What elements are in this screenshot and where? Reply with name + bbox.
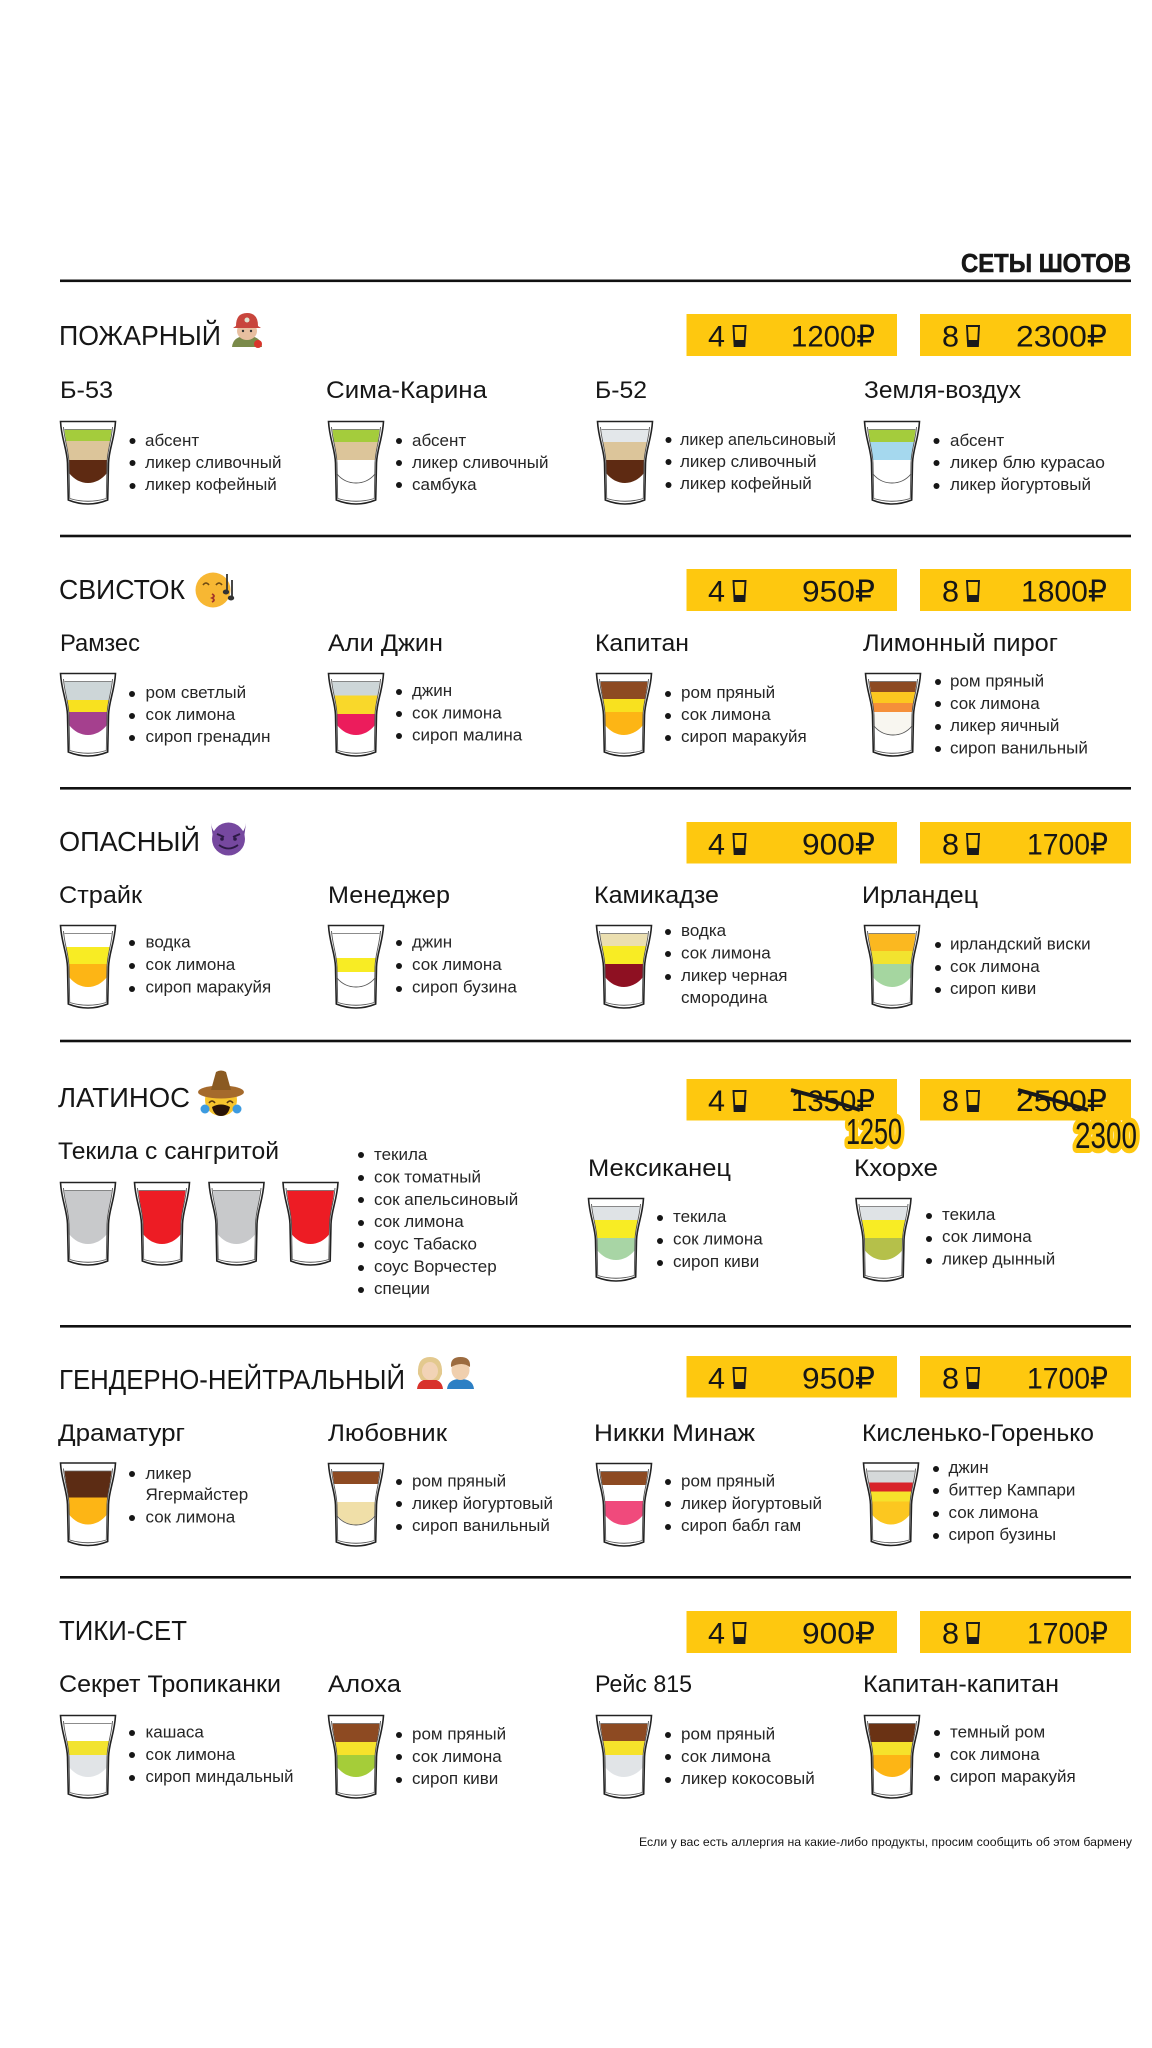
glass: [588, 1198, 644, 1281]
ingredients: сок лимона: [412, 1747, 502, 1766]
shot: Секрет Тропиканки: [59, 1671, 294, 1798]
section: ОПАСНЫЙ: [59, 822, 1131, 1008]
icon: whistling face emoji: [196, 572, 234, 608]
shot: Рейс 815: [595, 1671, 815, 1798]
ingredients: [129, 932, 271, 996]
ingredients: ром пряный: [412, 1472, 506, 1490]
glass: [328, 674, 384, 756]
ingredients: сироп маракуйя: [950, 1767, 1076, 1786]
ingredients: [358, 1145, 518, 1298]
glass: [596, 926, 652, 1008]
glass: [865, 674, 921, 756]
ingredients: водка: [146, 932, 191, 952]
ingredients: сок лимона: [146, 1508, 236, 1526]
ingredients: ликер сливочный: [680, 452, 816, 471]
price: 4 shots: 900₽: [802, 1618, 875, 1650]
section: ЛАТИНОС: [58, 1070, 1137, 1298]
ingredients: [396, 431, 548, 494]
price: 4 shots: [686, 569, 897, 611]
glass: [60, 926, 116, 1008]
price: 8 shots discounted: 2500₽: [1016, 1085, 1107, 1118]
ingredients: сироп бабл гам: [681, 1516, 801, 1535]
shot: Рейс 815: Рейс 815: [595, 1671, 692, 1698]
ingredients: сок лимона: [950, 694, 1040, 713]
shot: Любовник: Любовник: [328, 1420, 448, 1447]
ingredients: сок томатный: [374, 1168, 481, 1186]
ingredients: текила: [942, 1205, 996, 1224]
ingredients: кашаса: [146, 1722, 204, 1742]
price: 8 shots discounted: 8: [942, 1085, 959, 1118]
price: 8 shots: [920, 1611, 1131, 1653]
ingredients: ликер йогуртовый: [950, 475, 1091, 494]
ingredients: водка: [681, 921, 727, 940]
ingredients: сок лимона: [374, 1212, 464, 1231]
ingredients: ром пряный: [681, 1724, 775, 1744]
section: ПОЖАРНЫЙ: [59, 313, 1131, 504]
shot: Кхорхе: [854, 1155, 1055, 1281]
glass: [328, 1716, 384, 1798]
shot: Капитан-капитан: [863, 1671, 1076, 1798]
shot: Капитан-капитан: Капитан-капитан: [863, 1671, 1059, 1698]
heading: ГЕНДЕРНО-НЕЙТРАЛЬНЫЙ: [59, 1364, 405, 1395]
ingredients: [657, 1207, 763, 1271]
ingredients: ром пряный: [950, 672, 1044, 690]
ingredients: ликер йогуртовый: [412, 1494, 553, 1513]
shot: Б-52: Б-52: [595, 377, 647, 404]
ingredients: сок лимона: [681, 1747, 771, 1766]
icon: woman and man emoji: [417, 1357, 474, 1389]
ingredients: [396, 681, 523, 744]
ingredients: [396, 932, 517, 996]
shot: Али Джин: [328, 630, 523, 756]
glass: [596, 1716, 652, 1798]
ingredients: биттер Кампари: [948, 1480, 1075, 1500]
shot: Секрет Тропиканки: Секрет Тропиканки: [59, 1671, 281, 1698]
price: 4 shots discounted: [686, 1079, 902, 1152]
ingredients: ликер: [146, 1464, 191, 1483]
price: 4 shots discounted: 1250: [846, 1111, 902, 1152]
ingredients: [665, 1724, 815, 1788]
shot: Текила с сангритой: [58, 1138, 518, 1298]
heading: СВИСТОК: [59, 574, 186, 605]
ingredients: сок лимона: [948, 1503, 1039, 1522]
heading: ОПАСНЫЙ: [59, 826, 200, 857]
shot: Алоха: [328, 1671, 506, 1798]
price: 8 shots: 1700₽: [1027, 828, 1108, 862]
ingredients: сироп киви: [950, 979, 1036, 998]
ingredients: ликер кофейный: [680, 474, 812, 493]
ingredients: сок апельсиновый: [374, 1190, 518, 1209]
ingredients: ром пряный: [681, 683, 775, 702]
ingredients: смородина: [681, 988, 768, 1007]
shot: Б-53: [60, 377, 281, 504]
icon: sombrero laughing emoji: [198, 1070, 244, 1116]
ingredients: сироп бузина: [412, 978, 517, 996]
glass: [60, 1463, 116, 1546]
ingredients: сироп ванильный: [950, 738, 1088, 758]
ingredients: ликер яичный: [950, 716, 1059, 735]
ingredients: сок лимона: [942, 1227, 1032, 1246]
heading: ПОЖАРНЫЙ: [59, 320, 221, 351]
ingredients: ром пряный: [681, 1472, 775, 1490]
shot: Кисленько-Горенько: Кисленько-Горенько: [862, 1420, 1094, 1447]
shot: Сима-Карина: [326, 377, 548, 504]
shot: Капитан: [595, 630, 807, 756]
shot: Б-53: Б-53: [60, 377, 113, 404]
shot: Драматург: [58, 1420, 248, 1546]
shot: Никки Минаж: [594, 1420, 822, 1546]
shot: Б-52: [595, 377, 836, 504]
glass: [597, 422, 653, 504]
shot: Земля-воздух: [864, 377, 1105, 504]
section: СВИСТОК: [59, 569, 1131, 758]
ingredients: сироп бузины: [948, 1525, 1056, 1544]
price: 4 shots: 4: [708, 1618, 725, 1650]
ingredients: сироп киви: [412, 1769, 498, 1788]
glass: [328, 926, 384, 1008]
ingredients: текила: [374, 1145, 428, 1164]
ingredients: [933, 1458, 1075, 1544]
shot: Менеджер: [328, 882, 517, 1008]
ingredients: сок лимона: [412, 955, 502, 974]
price: 8 shots: 1800₽: [1021, 576, 1107, 608]
ingredients: [935, 672, 1088, 758]
icon: devil emoji: [211, 822, 246, 856]
shot: Менеджер: Менеджер: [328, 882, 450, 909]
ingredients: джин: [412, 681, 452, 700]
ingredients: сок лимона: [950, 957, 1040, 976]
ingredients: [396, 1472, 553, 1535]
shot: Али Джин: Али Джин: [328, 630, 443, 657]
glass: [596, 674, 652, 756]
price: 4 shots: [686, 1611, 897, 1653]
glass: sangrita: [134, 1182, 190, 1265]
price: 8 shots: 8: [942, 1362, 959, 1396]
ingredients: джин: [948, 1458, 989, 1477]
price: 4 shots: [686, 822, 897, 864]
shot: Камикадзе: Камикадзе: [594, 882, 719, 909]
glass: [328, 422, 384, 504]
ingredients: сок лимона: [681, 705, 771, 724]
price: 8 shots: 1700₽: [1027, 1362, 1108, 1396]
price: 4 shots: 900₽: [802, 828, 875, 862]
shot: Драматург: Драматург: [58, 1420, 185, 1447]
shot: Мексиканец: Мексиканец: [588, 1155, 731, 1182]
glass: [856, 1198, 912, 1281]
price: 8 shots: [920, 1356, 1131, 1398]
glass: [60, 422, 116, 504]
price: 8 shots: [920, 569, 1131, 611]
ingredients: сироп миндальный: [146, 1767, 294, 1786]
ingredients: сироп маракуйя: [681, 727, 807, 746]
ingredients: ликер кофейный: [145, 475, 277, 494]
ingredients: сок лимона: [412, 704, 502, 722]
ingredients: Ягермайстер: [146, 1485, 248, 1504]
ingredients: [665, 1472, 822, 1535]
price: 8 shots: 2300₽: [1016, 320, 1107, 354]
ingredients: самбука: [412, 475, 477, 494]
shot: Земля-воздух: Земля-воздух: [864, 377, 1021, 404]
shot: Любовник: [328, 1420, 553, 1546]
ingredients: сироп ванильный: [412, 1516, 550, 1535]
ingredients: сироп маракуйя: [146, 978, 271, 996]
ingredients: абсент: [950, 431, 1004, 450]
ingredients: [665, 921, 788, 1007]
glass: [60, 674, 116, 756]
shot: Сима-Карина: Сима-Карина: [326, 377, 488, 404]
shot: Рамзес: [60, 630, 270, 756]
ingredients: ликер дынный: [942, 1250, 1055, 1268]
price: 8 shots: 8: [942, 1618, 959, 1650]
ingredients: [934, 431, 1105, 494]
shot: Лимонный пирог: Лимонный пирог: [863, 630, 1058, 657]
shot: Рамзес: Рамзес: [60, 630, 140, 657]
ingredients: [129, 1722, 294, 1786]
ingredients: ликер блю курасао: [950, 453, 1105, 472]
ingredients: сок лимона: [681, 944, 771, 962]
glass: [863, 1463, 919, 1546]
ingredients: [665, 683, 807, 746]
ingredients: [129, 683, 270, 746]
price: 4 shots: 4: [708, 576, 725, 608]
ingredients: джин: [412, 932, 452, 952]
icon: firefighter emoji: [232, 313, 262, 348]
ingredients: сок лимона: [146, 955, 236, 974]
shot: Страйк: Страйк: [59, 882, 143, 909]
price: 8 shots: [920, 314, 1131, 356]
ingredients: абсент: [412, 431, 466, 450]
glass: [864, 926, 920, 1008]
shot: Лимонный пирог: [863, 630, 1088, 758]
ingredients: темный ром: [950, 1722, 1045, 1742]
footnote: Если у вас есть аллергия на какие-либо продукты, просим сообщить об этом бармену: [639, 1835, 1132, 1849]
price: 4 shots discounted: 4: [708, 1085, 725, 1118]
glass: [864, 1716, 920, 1798]
shot: Камикадзе: [594, 882, 788, 1008]
ingredients: [934, 1722, 1076, 1786]
glass: tequila: [208, 1182, 264, 1265]
ingredients: сок лимона: [146, 1745, 236, 1764]
ingredients: [926, 1205, 1055, 1268]
glass: [864, 422, 920, 504]
price: 8 shots: 8: [942, 576, 959, 608]
price: 4 shots discounted: 1350₽: [791, 1085, 875, 1118]
ingredients: [935, 934, 1091, 998]
price: 4 shots: 4: [708, 828, 725, 862]
shot: Кхорхе: Кхорхе: [854, 1155, 938, 1182]
glass: [60, 1716, 116, 1798]
glass: [596, 1464, 652, 1546]
shot: Алоха: Алоха: [328, 1671, 402, 1698]
price: 4 shots: 950₽: [802, 1362, 875, 1396]
ingredients: [129, 1464, 248, 1526]
price: 4 shots: [686, 1356, 897, 1398]
shot: Капитан: Капитан: [595, 630, 689, 657]
price: 4 shots: 4: [708, 1362, 725, 1396]
heading: ТИКИ-СЕТ: [59, 1615, 187, 1646]
ingredients: ликер сливочный: [145, 453, 281, 472]
section: ГЕНДЕРНО-НЕЙТРАЛЬНЫЙ: [58, 1356, 1131, 1546]
price: 8 shots discounted: [920, 1079, 1137, 1156]
ingredients: сироп киви: [673, 1252, 759, 1271]
title: СЕТЫ ШОТОВ: [961, 248, 1131, 278]
ingredients: ликер йогуртовый: [681, 1494, 822, 1513]
glass: sangrita: [282, 1182, 338, 1265]
ingredients: ликер кокосовый: [681, 1769, 815, 1788]
price: 4 shots: 1200₽: [791, 320, 875, 354]
ingredients: специи: [374, 1279, 430, 1298]
ingredients: ликер черная: [681, 966, 788, 985]
price: 4 shots: 4: [708, 320, 725, 354]
shot: Ирландец: Ирландец: [862, 882, 978, 909]
ingredients: абсент: [145, 431, 199, 450]
shot: Текила с сангритой: Текила с сангритой: [58, 1138, 279, 1165]
ingredients: текила: [673, 1207, 727, 1226]
ingredients: [396, 1724, 506, 1788]
ingredients: ром пряный: [412, 1724, 506, 1744]
glass: tequila: [60, 1182, 116, 1265]
shot: Ирландец: [862, 882, 1091, 1008]
ingredients: [666, 430, 836, 493]
ingredients: соус Табаско: [374, 1234, 477, 1254]
heading: ЛАТИНОС: [58, 1082, 190, 1113]
shot: Страйк: [59, 882, 271, 1008]
ingredients: [130, 431, 281, 494]
shot: Мексиканец: [588, 1155, 763, 1281]
shot: Кисленько-Горенько: [862, 1420, 1094, 1546]
price: 4 shots: 950₽: [802, 576, 875, 608]
price: 8 shots: [920, 822, 1131, 864]
ingredients: сок лимона: [950, 1745, 1040, 1764]
ingredients: сироп гренадин: [146, 727, 270, 746]
price: 8 shots: 8: [942, 828, 959, 862]
ingredients: ирландский виски: [950, 934, 1091, 954]
ingredients: ликер сливочный: [412, 453, 548, 472]
shot: Никки Минаж: Никки Минаж: [594, 1420, 755, 1447]
price: 8 shots: 1700₽: [1027, 1618, 1108, 1650]
section: ТИКИ-СЕТ: [59, 1611, 1131, 1798]
price: 4 shots: [686, 314, 897, 356]
ingredients: сок лимона: [673, 1230, 763, 1248]
ingredients: соус Ворчестер: [374, 1257, 497, 1276]
ingredients: ром светлый: [146, 683, 246, 702]
price: 8 shots: 8: [942, 320, 959, 354]
ingredients: ликер апельсиновый: [680, 430, 836, 449]
glass: [328, 1464, 384, 1546]
ingredients: сок лимона: [146, 705, 236, 724]
ingredients: сироп малина: [412, 726, 523, 744]
